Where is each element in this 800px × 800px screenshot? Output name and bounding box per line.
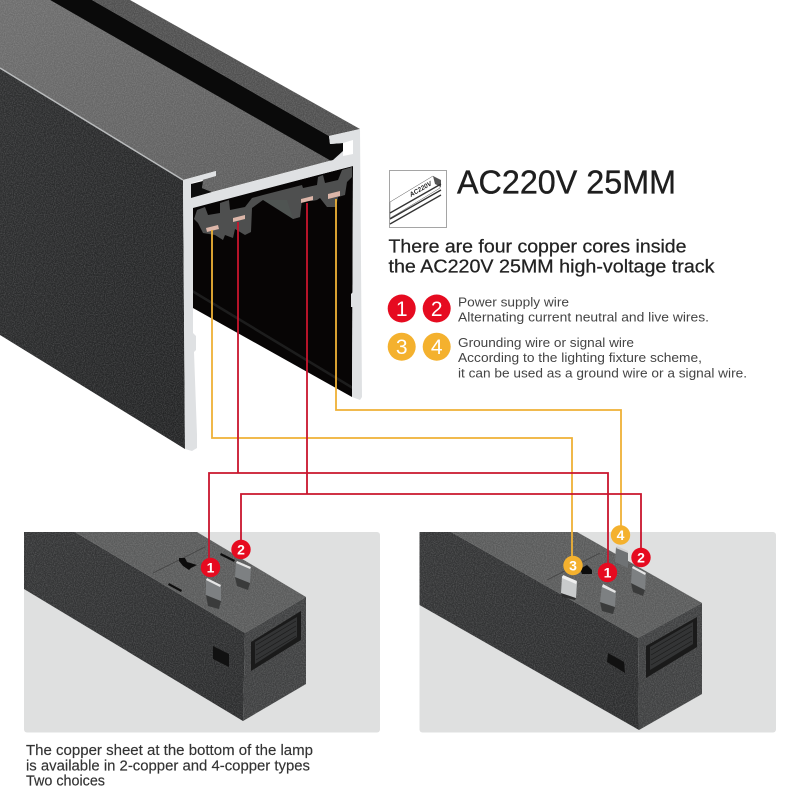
lamp front face (243, 597, 306, 721)
panel: 2-copper lamp (24, 532, 380, 732)
subtitle: the AC220V 25MM high-voltage track (388, 256, 715, 276)
lamp front face (638, 603, 702, 730)
badge 3 right (563, 556, 583, 575)
legend: power wires (388, 294, 709, 324)
badge 1 left: 1 (207, 560, 215, 576)
legend text: Grounding wire or signal wire (458, 335, 634, 350)
pin 2 (235, 561, 251, 590)
badge 2 left (231, 540, 251, 559)
legend badge 1 (388, 294, 416, 322)
icon: track thumbnail: AC220V (408, 180, 434, 199)
aluminium profile (183, 129, 362, 451)
profile hook recess (191, 181, 212, 198)
track left side face (0, 68, 185, 449)
inner grey rib (263, 190, 301, 219)
panel background (24, 532, 380, 732)
lamp badges (201, 525, 651, 582)
badge 3 right: 3 (569, 558, 577, 574)
side vent (251, 611, 301, 671)
legend text: Alternating current neutral and live wires. (458, 310, 709, 324)
red riser for core 2 (306, 203, 308, 494)
pin 1 (600, 584, 616, 614)
badge 2 right (631, 548, 651, 567)
track top face (0, 0, 333, 192)
caption: is available in 2-copper and 4-copper types (26, 758, 310, 774)
panel: 4-copper lamp (420, 532, 776, 732)
legend badge 2: 2 (431, 298, 443, 321)
legend text: According to the lighting fixture scheme, (458, 350, 702, 365)
legend: ground or signal wires (388, 333, 747, 380)
icon: track thumbnail (390, 170, 446, 228)
slot left (168, 583, 182, 592)
copper core pads (206, 191, 340, 232)
wiring diagram (209, 199, 641, 565)
badge 2 right: 2 (637, 550, 645, 566)
red wire to core 1 (209, 473, 608, 565)
pin 3 (561, 575, 577, 600)
badge 4 right (611, 525, 630, 545)
pin 2 (631, 566, 646, 596)
legend text (458, 335, 747, 380)
track right top strip (92, 0, 360, 136)
cross key mark (580, 565, 592, 574)
caption (26, 743, 313, 790)
black top channel (50, 0, 343, 162)
track top left edge highlight (0, 68, 183, 180)
panel background (420, 532, 776, 732)
subtitle: There are four copper cores inside (388, 236, 686, 256)
legend text (458, 294, 709, 324)
pin 1 (206, 578, 221, 609)
track cross-section illustration (0, 0, 362, 451)
slot right (220, 553, 235, 562)
yellow wire to core 4 (336, 199, 621, 527)
legend badge 4: 4 (431, 336, 443, 359)
lamp top face (75, 532, 306, 633)
caption: The copper sheet at the bottom of the lamp (26, 743, 313, 759)
right wall notch (351, 273, 355, 307)
legend badge 3 (388, 333, 416, 361)
badge 1 right (598, 563, 617, 582)
badge 2 left: 2 (237, 542, 245, 558)
legend badge 2 (423, 294, 451, 322)
legend badge 4 (423, 333, 451, 361)
legend badge 3: 3 (396, 336, 408, 359)
cross key mark (179, 558, 197, 570)
caption: Two choices (26, 774, 105, 790)
legend text: Power supply wire (458, 294, 569, 310)
interior of the track (193, 166, 353, 397)
top seam (547, 553, 600, 580)
legend badge 1: 1 (396, 298, 408, 321)
pin 4 (615, 546, 628, 568)
lamp top face (451, 532, 702, 638)
lamp side face (24, 532, 245, 721)
side switch (213, 646, 229, 667)
rubber insulator (194, 167, 352, 240)
badge 4 right: 4 (617, 527, 625, 543)
subtitle (388, 236, 715, 276)
badge 1 right: 1 (604, 564, 612, 580)
legend text: it can be used as a ground wire or a signal wire. (458, 366, 747, 380)
title: AC220V 25MM (457, 164, 676, 200)
red wire to core 2 (241, 494, 641, 550)
yellow wire to core 3 (212, 230, 572, 558)
lamp side face (420, 532, 639, 730)
badge 1 left (201, 558, 220, 577)
side vent (646, 617, 697, 678)
red riser for core 1 (237, 222, 239, 473)
top seam (153, 547, 205, 573)
side switch (607, 653, 625, 673)
